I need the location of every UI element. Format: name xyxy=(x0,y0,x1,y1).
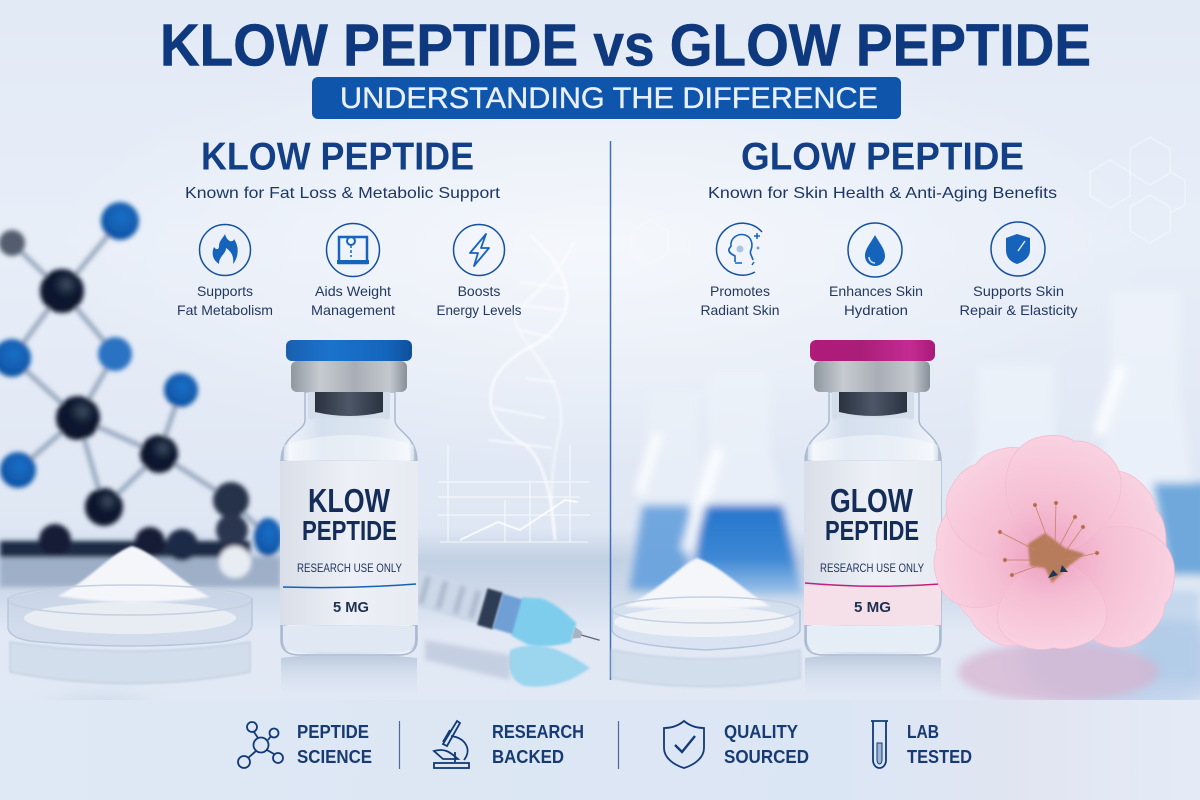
icon: lightning bolt xyxy=(454,224,504,276)
GLOW benefit labels xyxy=(700,283,1078,318)
bottom item: quality sourced: QUALITY xyxy=(724,722,798,742)
panel: GLOW peptide heading xyxy=(708,136,1057,202)
vial: KLOW xyxy=(280,340,418,700)
bottom item: peptide science xyxy=(238,722,372,768)
bottom item: lab tested xyxy=(871,721,972,768)
icon: shield xyxy=(991,222,1045,276)
icon: flame xyxy=(200,224,250,276)
vial: GLOW: 5 MG xyxy=(854,599,891,616)
vial: KLOW: KLOW xyxy=(308,482,391,519)
GLOW benefit labels: Hydration xyxy=(844,302,908,318)
bottom item: quality sourced xyxy=(664,721,809,768)
hexagon watermark xyxy=(632,137,1185,264)
DNA and growth chart watermark xyxy=(438,235,590,542)
KLOW benefit labels: Supports xyxy=(197,283,253,299)
GLOW benefit labels: Supports Skin xyxy=(973,283,1064,299)
KLOW benefit labels: Management xyxy=(311,302,395,318)
GLOW benefit labels: Enhances Skin xyxy=(829,283,923,299)
panel: KLOW peptide heading: Known for Fat Loss & Metabolic Support xyxy=(185,185,501,202)
vial: GLOW: PEPTIDE xyxy=(825,515,919,546)
vial: KLOW: 5 MG xyxy=(333,599,369,616)
vial: GLOW: GLOW xyxy=(830,482,914,519)
icon: weight scale xyxy=(326,224,380,276)
bottom band xyxy=(0,700,1200,800)
vial: GLOW: RESEARCH USE ONLY xyxy=(820,561,924,575)
icon: water drop xyxy=(848,223,902,277)
KLOW benefit labels: Energy Levels xyxy=(436,302,522,318)
subtitle banner: UNDERSTANDING THE DIFFERENCE xyxy=(340,82,878,115)
center divider xyxy=(610,141,612,680)
vial: KLOW: PEPTIDE xyxy=(302,515,397,546)
panel: KLOW peptide heading xyxy=(185,136,501,202)
bottom divider xyxy=(398,721,400,769)
GLOW benefit labels: Promotes xyxy=(710,283,770,299)
KLOW benefit labels: Aids Weight xyxy=(315,283,391,299)
KLOW benefit labels: Boosts xyxy=(458,283,500,299)
bottom item: research backed: BACKED xyxy=(492,747,564,767)
molecular model xyxy=(0,202,282,587)
KLOW benefit labels xyxy=(177,283,522,318)
bottom item: peptide science: SCIENCE xyxy=(297,747,372,767)
icon: radiant face xyxy=(717,223,762,275)
bottom item: research backed: RESEARCH xyxy=(492,722,584,742)
main title: KLOW PEPTIDE vs GLOW PEPTIDE xyxy=(160,12,1091,78)
bottom item: lab tested: LAB xyxy=(907,722,939,742)
flower reflection xyxy=(958,642,1158,702)
glass flasks with blue liquid xyxy=(625,290,1200,680)
bottom item: research backed xyxy=(434,721,584,768)
bottom item: peptide science: PEPTIDE xyxy=(297,722,369,742)
icon: pink flower xyxy=(929,425,1189,661)
bottom item: quality sourced: SOURCED xyxy=(724,747,809,767)
bottom divider xyxy=(618,721,620,769)
KLOW benefit labels: Fat Metabolism xyxy=(177,302,273,318)
GLOW benefit labels: Radiant Skin xyxy=(700,302,780,318)
vial: KLOW: RESEARCH USE ONLY xyxy=(297,561,402,575)
bottom item: lab tested: TESTED xyxy=(907,747,972,767)
panel: GLOW peptide heading: GLOW PEPTIDE xyxy=(741,136,1024,178)
petri dish with white powder: right xyxy=(612,558,800,686)
panel: GLOW peptide heading: Known for Skin Health & Anti-Aging Benefits xyxy=(708,185,1057,202)
vial: GLOW xyxy=(804,340,941,700)
petri dish with white powder: left xyxy=(8,546,252,755)
panel: KLOW peptide heading: KLOW PEPTIDE xyxy=(201,136,474,178)
syringe xyxy=(408,564,606,687)
GLOW benefit labels: Repair & Elasticity xyxy=(960,302,1078,318)
